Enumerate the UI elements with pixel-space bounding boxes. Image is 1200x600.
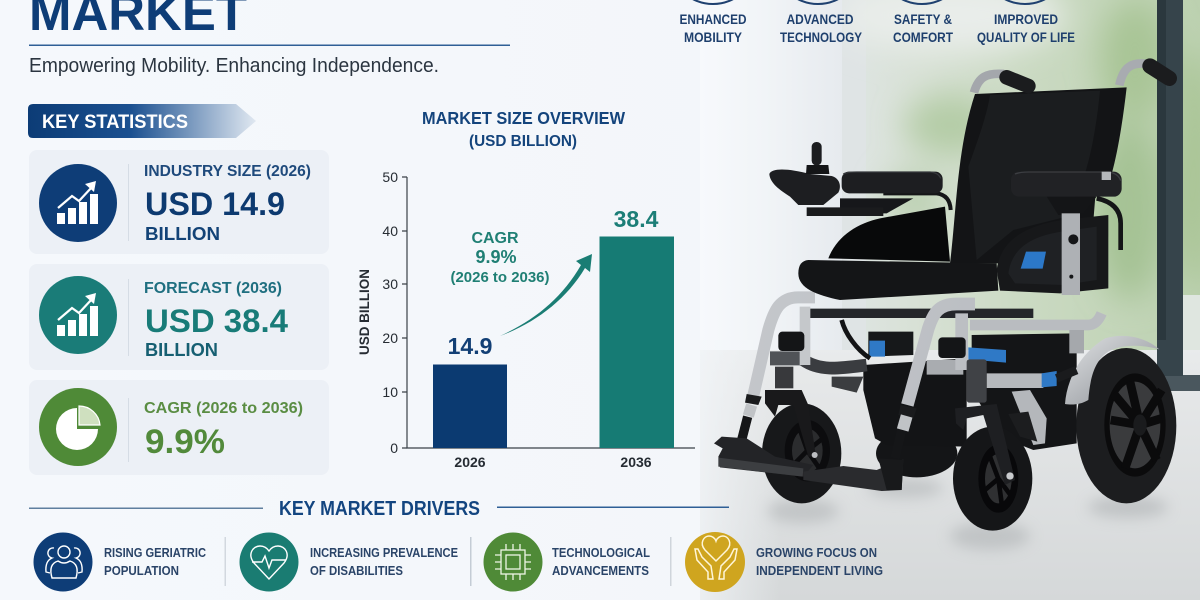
bar 2036: 2036 xyxy=(620,454,652,470)
right front caster xyxy=(953,427,1032,531)
top benefit icons and labels: COMFORT xyxy=(893,30,954,45)
panel: CAGR: CAGR (2026 to 2036) xyxy=(144,400,303,417)
bar chart: 30 xyxy=(382,276,398,292)
key statistics banner xyxy=(28,104,256,138)
key statistics banner: KEY STATISTICS xyxy=(42,112,188,133)
icon: pie chart green xyxy=(39,388,117,466)
CAGR callout: (2026 to 2036) xyxy=(450,270,550,286)
icon: people xyxy=(34,532,92,592)
bar 2026 xyxy=(433,333,507,470)
driver: rising geriatric population: POPULATION xyxy=(104,563,179,578)
driver: rising geriatric population: RISING GERIATRIC xyxy=(104,545,207,560)
tagline: Empowering Mobility. Enhancing Independence. xyxy=(29,55,439,77)
top benefit icons and labels: MOBILITY xyxy=(684,30,742,45)
chart title: (USD BILLION) xyxy=(469,133,577,150)
panel: industry size 2026: INDUSTRY SIZE (2026) xyxy=(144,163,311,180)
chart title: MARKET SIZE OVERVIEW xyxy=(422,108,625,128)
bar chart: 40 xyxy=(382,223,398,239)
driver: prevalence of disabilities xyxy=(240,532,458,592)
panel: industry size 2026: BILLION xyxy=(145,223,220,244)
wheelchair side cushion xyxy=(828,207,950,262)
rear wheel xyxy=(1076,348,1176,503)
bar 2036: 38.4 xyxy=(614,206,659,232)
top benefit icons and labels: ENHANCED xyxy=(680,12,747,27)
icon: chip xyxy=(484,532,542,592)
driver: independent living xyxy=(685,532,883,592)
photo backdrop: room with window and floor xyxy=(670,0,1200,600)
driver: prevalence of disabilities: OF DISABILITIES xyxy=(310,563,403,578)
driver: technological advancements: ADVANCEMENTS xyxy=(552,563,649,578)
bar 2026: 2026 xyxy=(454,454,486,470)
wheelchair backrest xyxy=(950,87,1127,263)
panel: forecast 2036: USD 38.4 xyxy=(145,303,288,339)
bar 2036 xyxy=(600,206,674,470)
driver: technological advancements xyxy=(484,532,650,592)
bar 2026: 14.9 xyxy=(448,333,492,359)
panel: industry size 2026 xyxy=(29,150,329,254)
left leg tube xyxy=(753,297,815,398)
arrow: growth xyxy=(500,254,592,336)
panel: CAGR: 9.9% xyxy=(145,423,225,461)
driver: prevalence of disabilities: INCREASING PREVALENCE xyxy=(310,545,458,560)
frame tubes xyxy=(970,313,1102,325)
chart title xyxy=(422,108,625,150)
panel: CAGR xyxy=(29,380,329,475)
bar chart: 50 xyxy=(382,169,398,185)
driver: technological advancements: TECHNOLOGICAL xyxy=(552,545,650,560)
top benefit icons and labels: QUALITY OF LIFE xyxy=(977,30,1075,45)
wheelchair lower chassis xyxy=(714,297,1176,531)
icon: growth chart navy xyxy=(39,164,117,242)
top benefit icons and labels: TECHNOLOGY xyxy=(780,30,862,45)
bar chart: 10 xyxy=(382,384,398,400)
panel: forecast 2036 xyxy=(29,264,329,370)
blue brand label xyxy=(1021,252,1046,269)
footrests xyxy=(714,437,813,477)
driver: independent living: INDEPENDENT LIVING xyxy=(756,563,883,578)
bar chart: USD BILLION xyxy=(356,269,372,355)
wheelchair push handles xyxy=(974,63,1169,93)
driver: independent living: GROWING FOCUS ON xyxy=(756,545,877,560)
bar chart xyxy=(356,169,695,470)
left front caster fork xyxy=(775,367,793,388)
top benefit icons and labels: IMPROVED xyxy=(994,12,1058,27)
CAGR callout: 9.9% xyxy=(475,247,517,267)
bar chart: 20 xyxy=(382,330,398,346)
wheelchair photo illustration xyxy=(714,63,1176,531)
top benefit icons and labels: SAFETY & xyxy=(894,12,952,27)
driver: rising geriatric population xyxy=(34,532,207,592)
wheelchair right armrest and side panel xyxy=(997,172,1122,295)
panel: forecast 2036: FORECAST (2036) xyxy=(144,280,282,297)
panel: industry size 2026: USD 14.9 xyxy=(145,186,285,222)
CAGR callout: CAGR xyxy=(471,230,519,247)
right leg tube xyxy=(907,304,975,405)
CAGR callout xyxy=(450,230,550,286)
top benefit icons and labels: ADVANCED xyxy=(786,12,854,27)
panel: forecast 2036: BILLION xyxy=(145,339,218,360)
icon: growth chart teal xyxy=(39,276,117,354)
title rule xyxy=(29,44,510,46)
top benefit icons and labels xyxy=(669,0,1075,45)
wheelchair left armrest and joystick xyxy=(769,142,951,213)
icon: hands and heart xyxy=(685,532,745,592)
fender xyxy=(1065,336,1159,405)
key market drivers heading: KEY MARKET DRIVERS xyxy=(279,498,480,520)
wheelchair seat xyxy=(798,260,998,300)
bar chart: 0 xyxy=(390,440,398,456)
icon: heart pulse xyxy=(240,532,298,592)
